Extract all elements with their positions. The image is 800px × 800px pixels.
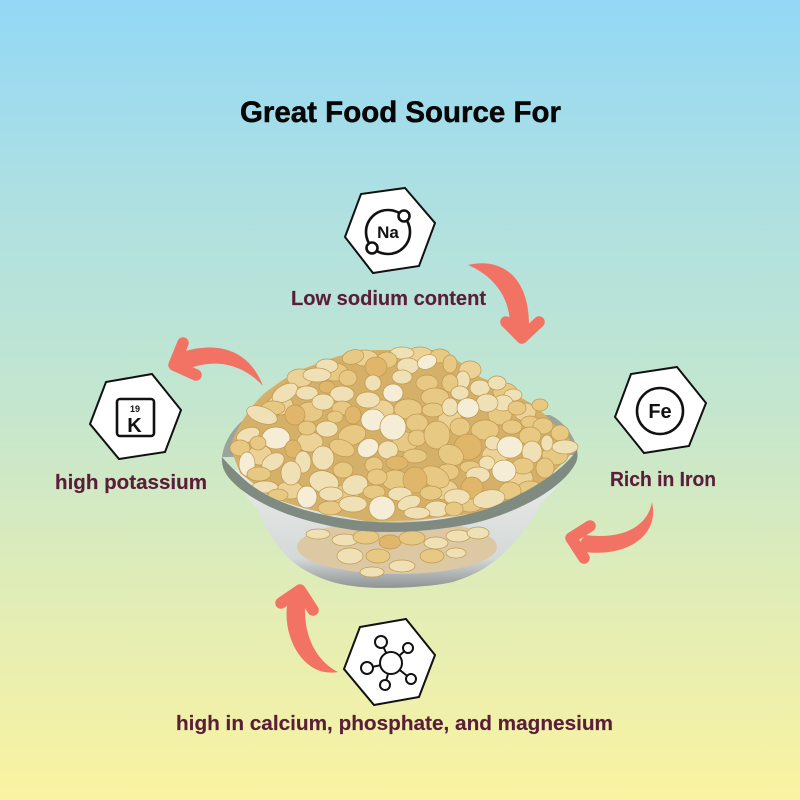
- hexagon with sodium icon: [345, 188, 435, 273]
- title: Great Food Source For: [240, 96, 561, 129]
- glass bowl body: [228, 470, 572, 588]
- hexagon with sodium icon: Na: [377, 223, 399, 242]
- hexagon with potassium icon: [90, 374, 181, 459]
- nutrient: low sodium: [291, 188, 539, 338]
- hexagon with iron icon: [615, 367, 706, 453]
- hexagon with potassium icon: 19: [130, 404, 140, 414]
- bowl of chana dal: [222, 347, 578, 588]
- nutrient: calcium, phosphate, magnesium: [176, 590, 613, 735]
- individual split chickpeas: [230, 347, 578, 520]
- nutrient: rich in iron: [571, 367, 716, 558]
- lentils seen through glass: [297, 520, 497, 577]
- nutrient: high potassium: [55, 343, 263, 494]
- label: high potassium: high potassium: [55, 472, 207, 494]
- label: calcium, phosphate, magnesium: high in calcium, phosphate, and magnesium: [176, 713, 613, 735]
- hexagon with potassium icon: K: [127, 415, 142, 437]
- hexagon with iron icon: Fe: [648, 401, 672, 423]
- label: rich in iron: Rich in Iron: [610, 469, 716, 491]
- label: low sodium: Low sodium content: [291, 288, 486, 310]
- hexagon with molecule icon: [344, 619, 435, 705]
- arrow: calcium to potassium: [281, 590, 338, 673]
- arrow: potassium to sodium: [174, 343, 263, 386]
- grain mound background: [230, 350, 578, 522]
- glass bowl back rim: [222, 415, 577, 457]
- arrow: sodium to iron: [468, 263, 539, 338]
- glass rim: [222, 450, 578, 532]
- arrow: iron to calcium: [571, 502, 653, 558]
- filler chickpeas: [248, 347, 568, 515]
